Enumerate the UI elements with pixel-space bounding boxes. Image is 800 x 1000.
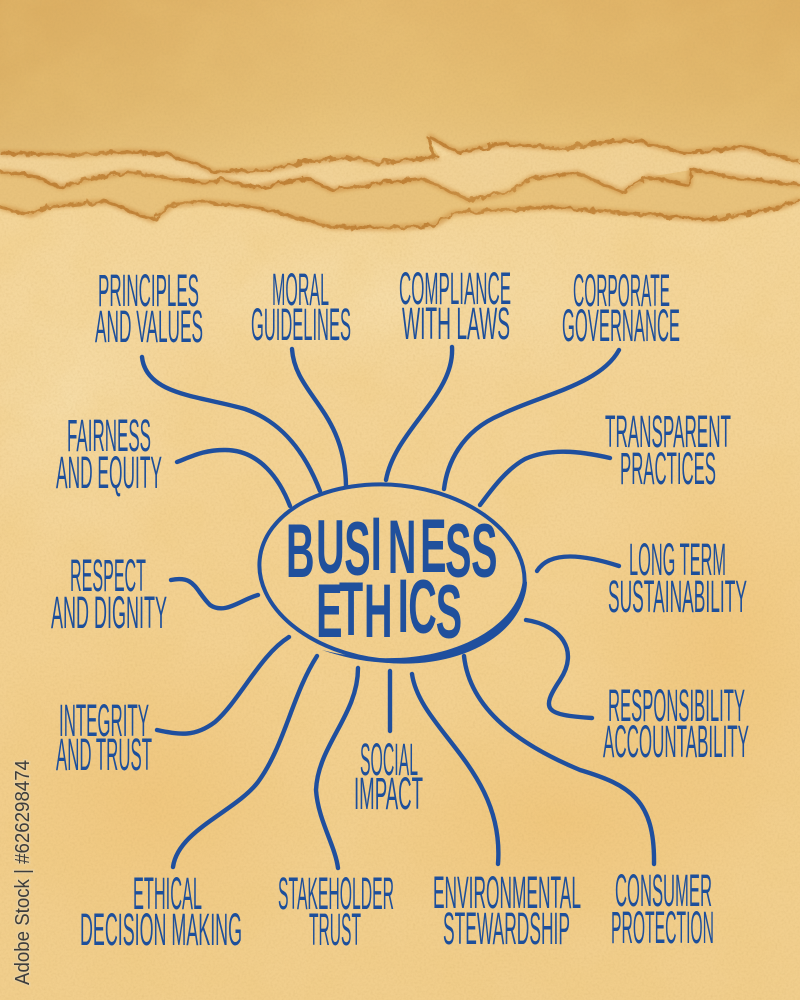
text: SOCIAL — [360, 734, 418, 785]
label: transparent practices — [605, 406, 731, 494]
central title: Business Ethics — [286, 501, 497, 654]
text: STAKEHOLDER — [278, 868, 394, 919]
connector: integrity and trust — [157, 637, 289, 734]
central oval — [251, 472, 533, 674]
central title: Business Ethics: BUSINESS — [286, 501, 497, 593]
text: PRINCIPLES — [98, 265, 199, 316]
label: responsibility accountability — [603, 680, 749, 767]
connector: long term sustainability — [537, 556, 619, 571]
label: environmental stewardship — [433, 867, 581, 954]
label: social impact — [354, 734, 423, 819]
text: STEWARDSHIP — [443, 903, 570, 954]
label: compliance with laws — [399, 263, 511, 349]
connector: transparent practices — [480, 452, 610, 505]
connector: corporate governance — [444, 350, 619, 489]
text: IMPACT — [354, 768, 423, 819]
text: AND VALUES — [95, 301, 203, 352]
text: WITH LAWS — [402, 298, 510, 349]
label: stakeholder trust: TRUST — [309, 904, 361, 955]
connector: respect and dignity — [171, 579, 258, 608]
text: AND TRUST — [56, 729, 152, 780]
text: MORAL — [272, 264, 329, 315]
label: consumer protection — [611, 865, 714, 953]
stock watermark id: Adobe Stock | #626298474 — [12, 760, 34, 985]
label: corporate governance — [562, 265, 680, 351]
text: DECISION MAKING — [80, 904, 242, 955]
torn deckled paper strip — [0, 136, 800, 228]
text: INTEGRITY — [59, 695, 149, 746]
central title: Business Ethics: ETHICS — [316, 563, 462, 654]
top paper layer — [0, 0, 800, 172]
label: stakeholder trust — [278, 868, 394, 955]
text: GUIDELINES — [251, 299, 351, 350]
connector: fairness and equity — [177, 450, 290, 506]
label: ethical decision making — [80, 868, 242, 955]
label: principles and values — [95, 265, 203, 352]
text: COMPLIANCE — [399, 263, 511, 314]
connector: consumer protection — [464, 656, 654, 864]
label: ethical decision making: ETHICAL — [133, 868, 202, 919]
text: AND EQUITY — [56, 447, 162, 498]
label: long term sustainability — [608, 534, 747, 622]
label: fairness and equity — [56, 410, 162, 498]
connector: moral guidelines — [292, 349, 346, 486]
connector: responsibility accountability — [526, 620, 592, 718]
text: AND DIGNITY — [51, 587, 167, 638]
connector: principles and values — [142, 357, 320, 491]
text: FAIRNESS — [67, 410, 151, 461]
label: moral guidelines — [251, 264, 351, 350]
connector: stakeholder trust — [316, 668, 358, 868]
text: RESPECT — [70, 550, 146, 601]
connector: ethical decision making — [173, 656, 317, 867]
connector: social impact — [388, 671, 392, 731]
label: respect and dignity — [51, 550, 167, 638]
connector: compliance with laws — [386, 347, 452, 480]
label: integrity and trust — [56, 695, 152, 780]
connector: environmental stewardship — [412, 674, 498, 864]
